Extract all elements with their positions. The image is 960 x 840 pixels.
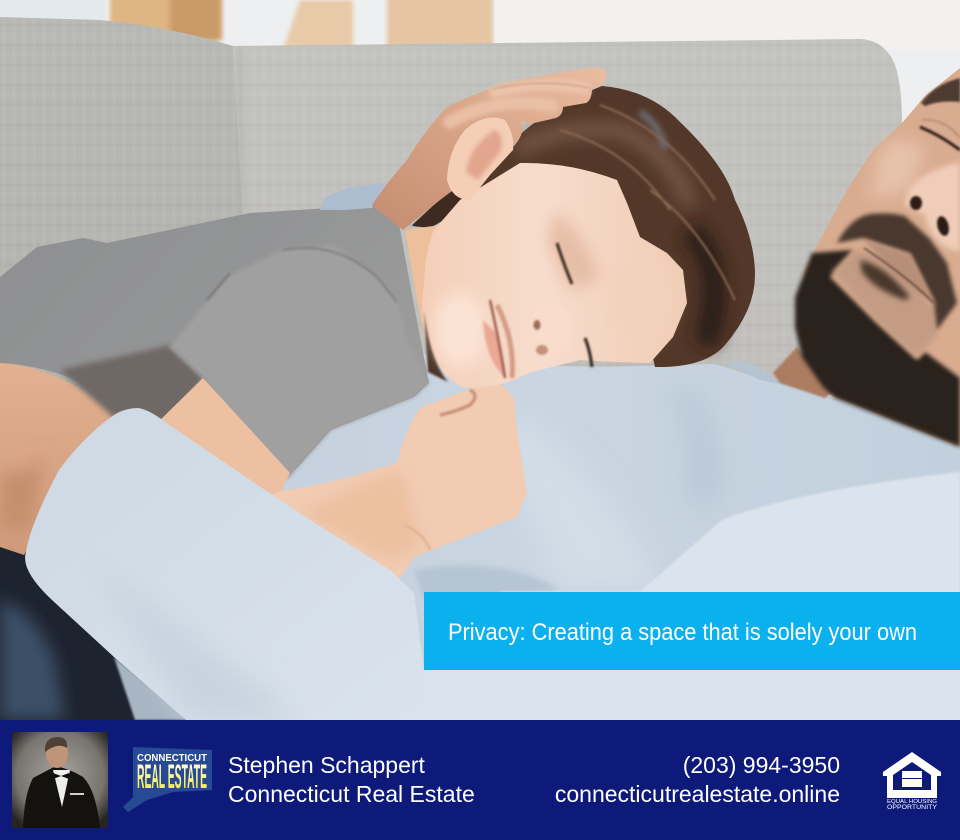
face skin <box>800 68 960 447</box>
caption text: Privacy: Creating a space that is solely your own <box>448 619 917 646</box>
child's ear <box>447 118 513 200</box>
phone and website: (203) 994-3950 <box>683 752 840 778</box>
footer banner <box>0 720 960 840</box>
father's forearm <box>0 363 125 555</box>
soul patch <box>860 260 910 300</box>
sofa cushions <box>0 17 902 440</box>
company logo <box>123 747 212 812</box>
father's shirt chest <box>120 350 960 720</box>
chin patch skin <box>832 250 937 357</box>
sleeve <box>170 245 429 480</box>
child's t-shirt <box>0 205 429 480</box>
child's hair <box>412 86 755 367</box>
phone and website: connecticutrealestate.online <box>555 781 840 807</box>
father's hand on child's head <box>372 68 607 230</box>
neck <box>773 347 835 398</box>
eye lash lower <box>585 338 592 367</box>
eye lash upper <box>557 243 572 284</box>
mouth <box>483 320 505 378</box>
father's head <box>773 68 960 447</box>
icon: equal housing opportunity: OPPORTUNITY <box>887 805 937 811</box>
child's neck <box>405 225 440 360</box>
child's arm and hand <box>150 378 527 585</box>
closed eye <box>920 127 960 150</box>
lips <box>863 240 936 305</box>
moustache <box>837 213 957 330</box>
jeans <box>0 520 190 720</box>
agent portrait <box>12 732 108 828</box>
logo text top: CONNECTICUT <box>137 753 207 764</box>
nose <box>905 162 960 252</box>
beard <box>795 250 960 447</box>
child's face <box>422 163 687 388</box>
father's shirt cuff at wrist <box>320 183 385 210</box>
agent name and company: Stephen Schappert <box>228 752 426 778</box>
lower chest highlight <box>500 472 960 720</box>
nose <box>527 303 573 357</box>
caption bar <box>424 592 960 670</box>
icon: equal housing opportunity <box>883 752 941 811</box>
father's sleeve <box>25 408 960 720</box>
label text: EQUAL HOUSING <box>887 799 937 805</box>
phone and website <box>555 752 840 807</box>
shadowed torso <box>60 345 205 425</box>
eyebrow <box>921 78 960 106</box>
footer banner: REAL ESTATE <box>137 758 207 796</box>
agent name and company <box>228 752 475 807</box>
agent name and company: Connecticut Real Estate <box>228 781 475 807</box>
